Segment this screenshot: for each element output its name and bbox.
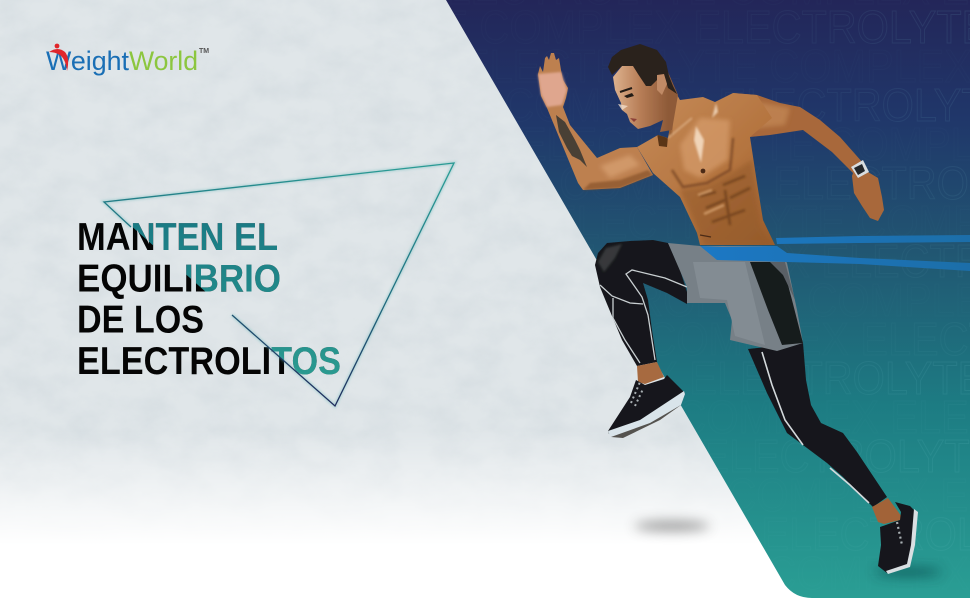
raised leg seams — [600, 270, 687, 363]
back shoe sole — [886, 509, 918, 574]
front shoe — [608, 375, 685, 437]
head: hair — [608, 44, 677, 94]
waist band — [700, 246, 970, 271]
shorts — [668, 243, 803, 351]
forearm tattoo — [556, 115, 587, 167]
upper resistance band — [776, 235, 970, 244]
raised arm — [538, 53, 653, 190]
shadow: front foot — [634, 521, 710, 531]
upper arm light — [600, 155, 640, 178]
head: face and neck — [613, 62, 678, 132]
raised hand highlight — [538, 72, 567, 107]
heading: Manten el equilibrio de los electrolitos: ELECTROLITOS — [77, 340, 341, 383]
ear — [657, 74, 667, 95]
heading: Manten el equilibrio de los electrolitos: MANTEN EL — [77, 216, 278, 259]
watermark text rows — [774, 10, 970, 472]
heading: Manten el equilibrio de los electrolitos: DE LOS — [77, 298, 204, 342]
front ankle — [637, 362, 664, 384]
logo: WeightWorld: TM — [199, 48, 209, 55]
back shoe — [878, 502, 916, 573]
far arm light — [745, 100, 790, 128]
heading colour overlay inside triangle — [104, 163, 454, 406]
back leg — [748, 343, 887, 507]
far arm — [733, 93, 884, 221]
heading: Manten el equilibrio de los electrolitos: EQUILIBRIO — [77, 258, 281, 300]
triangle outline — [104, 163, 454, 406]
back leg seam — [762, 352, 869, 503]
watch — [851, 160, 869, 178]
torso — [637, 93, 775, 245]
panel: diagonal gradient panel — [446, 0, 970, 598]
logo: WeightWorld: World — [129, 46, 198, 76]
shorts grey side panel — [770, 262, 795, 300]
nipple — [701, 169, 705, 173]
raised leg highlight — [598, 244, 622, 272]
logo: WeightWorld: Weight — [46, 46, 129, 76]
shorts lighter panel — [693, 262, 765, 345]
front shoe sole — [608, 391, 685, 437]
heading: Manten el equilibrio de los electrolitos — [77, 216, 341, 383]
logo: WeightWorld — [46, 44, 209, 76]
torso shading — [657, 103, 758, 244]
navel — [700, 235, 711, 237]
back shoe laces — [897, 522, 902, 545]
shadow: back foot — [874, 568, 942, 576]
figure: running athlete — [538, 44, 970, 574]
upper arm shading — [583, 170, 653, 190]
raised leg — [595, 240, 687, 366]
front shoe laces — [631, 382, 643, 406]
back ankle — [872, 498, 902, 524]
head: facial features — [618, 88, 637, 122]
shorts dark panel — [750, 262, 803, 345]
